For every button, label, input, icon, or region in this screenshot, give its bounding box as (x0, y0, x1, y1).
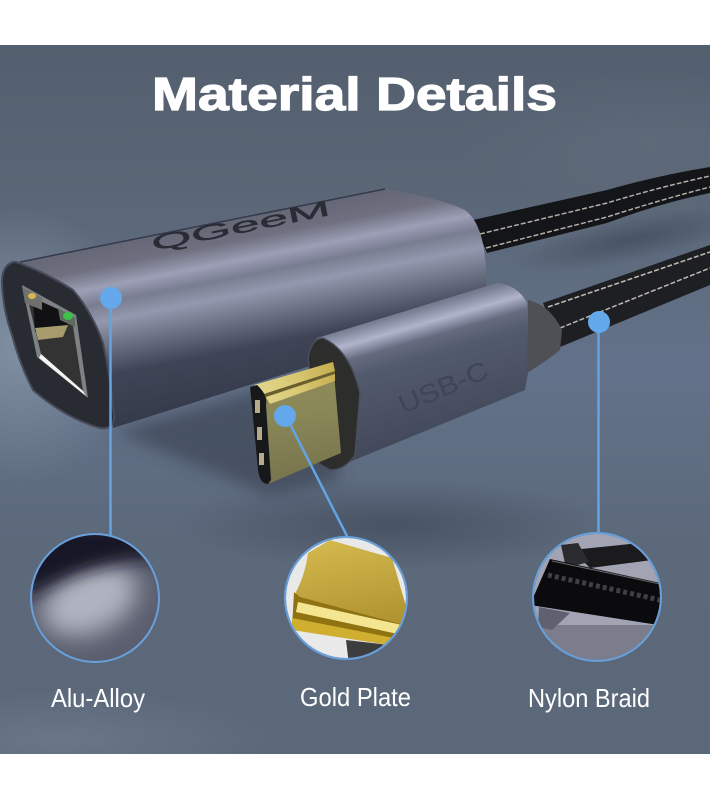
adapter: aluminium ethernet body (2, 189, 487, 428)
label: gold plate: Gold Plate (300, 682, 411, 712)
detail circle: nylon braid (530, 533, 665, 661)
callout: alu-alloy connector (100, 287, 122, 536)
ethernet port (22, 285, 88, 398)
grommet (527, 300, 562, 373)
cable: upper braided cable (473, 167, 710, 253)
text: USB-C label: USB-C (394, 355, 493, 420)
label: alu-alloy: Alu-Alloy (51, 683, 145, 713)
label: nylon braid: Nylon Braid (528, 683, 650, 713)
cable: lower braided cable (543, 245, 710, 347)
detail circle: gold plate (284, 536, 410, 665)
callout: gold plate connector (274, 405, 349, 540)
detail circle: alu-alloy (30, 533, 160, 663)
adapter front face (2, 262, 114, 428)
plug front collar (308, 338, 360, 470)
text: QGeeM logo: QGeeM (149, 197, 332, 256)
shadow under devices (115, 372, 340, 495)
callout: nylon braid connector (588, 311, 610, 534)
gold connector (250, 362, 341, 484)
title: Material Details (152, 68, 557, 120)
usb-c plug: housing (250, 283, 562, 484)
